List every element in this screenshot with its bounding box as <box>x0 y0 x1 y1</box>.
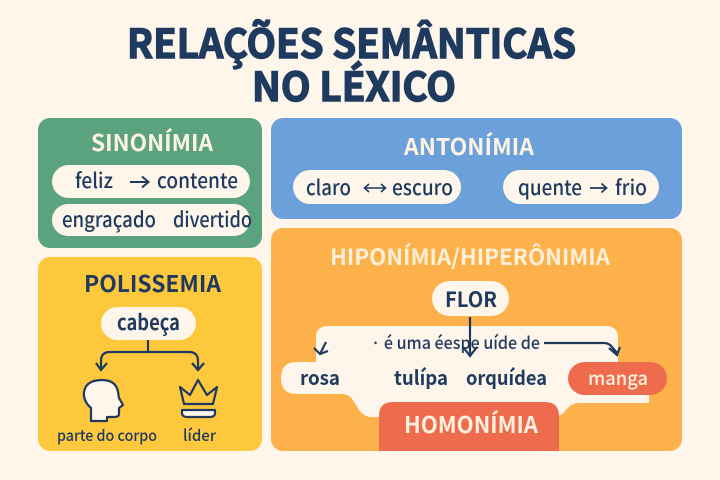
text: é uma espécie de: · é uma éespe uíde de <box>371 329 540 354</box>
label: rosa: rosa <box>300 362 340 391</box>
heading: polissemia: POLISSEMIA <box>84 265 221 299</box>
icon: crown <box>180 380 217 417</box>
pill: manga <box>568 362 667 395</box>
title: NO LÉXICO <box>252 55 456 113</box>
pill: claro escuro: claro <box>306 172 351 202</box>
pill: claro escuro: escuro <box>392 172 453 202</box>
arrow: right <box>544 343 620 355</box>
icon: head <box>84 380 123 421</box>
label: líder: líder <box>183 424 217 446</box>
heading: antonímia: ANTONÍMIA <box>403 128 534 162</box>
title <box>127 12 576 113</box>
label: tulípa: tulípa <box>394 362 448 391</box>
arrow: left <box>314 342 328 354</box>
panel: sinonímia <box>38 118 262 248</box>
pill: manga: manga <box>588 362 648 391</box>
diagram background <box>281 326 649 417</box>
pill: cabeça <box>101 307 196 340</box>
pill: quente frio: quente <box>518 172 582 202</box>
pill: flor <box>432 281 509 316</box>
pill: quente frio <box>503 170 659 204</box>
pill: engraçado divertido <box>52 204 252 236</box>
label: orquídea: orquídea <box>466 362 547 391</box>
pill: quente frio: frio <box>615 172 647 202</box>
panel: antonímia <box>271 118 682 219</box>
heading: sinonímia: SINONÍMIA <box>91 124 213 158</box>
block: homonímia: HOMONÍMIA <box>404 406 538 440</box>
pill: feliz contente: feliz <box>75 165 113 195</box>
pill: engraçado divertido: divertido <box>173 204 252 234</box>
pill: feliz contente <box>52 165 250 198</box>
title: RELAÇÕES SEMÂNTICAS <box>127 12 576 70</box>
pill: claro escuro <box>293 170 461 204</box>
panel: polissemia <box>38 257 262 451</box>
pill: cabeça: cabeça <box>117 307 180 337</box>
block: homonímia <box>379 402 559 451</box>
heading: hiponímia/hiperônimia: HIPONÍMIA/HIPERÔNIMIA <box>330 240 611 272</box>
pill: feliz contente: contente <box>157 165 238 195</box>
label: parte do corpo: parte do corpo <box>57 424 157 446</box>
arrow: flor down <box>463 317 477 356</box>
pill: flor: FLOR <box>445 284 497 314</box>
arrows: cabeça branches <box>96 340 204 370</box>
panel: hiponímia/hiperonímia <box>271 228 682 451</box>
pill: engraçado divertido: engraçado <box>62 204 156 234</box>
